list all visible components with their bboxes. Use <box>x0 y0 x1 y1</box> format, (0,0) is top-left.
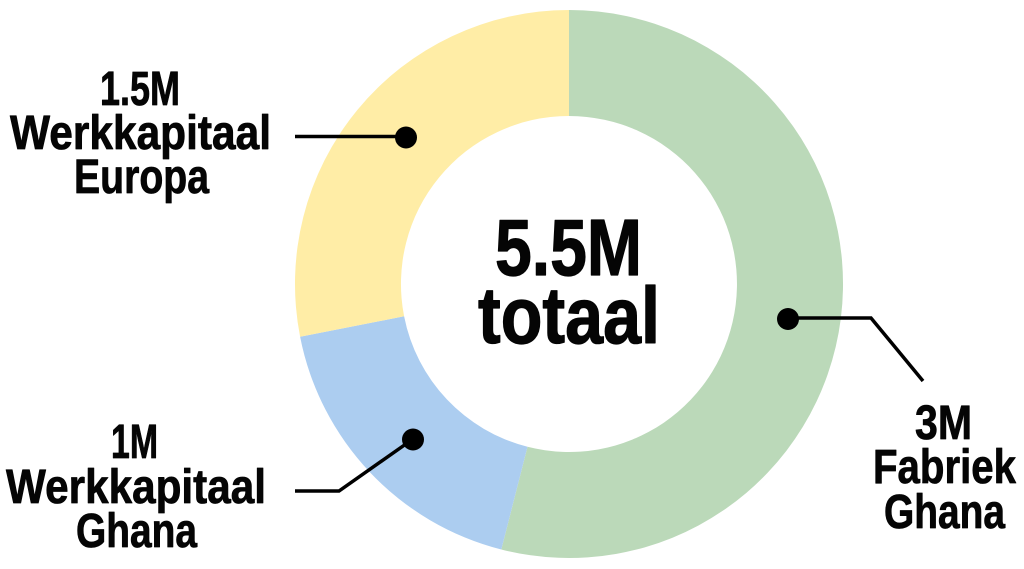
callout: 1.5M Werkkapitaal Europa: Europa <box>74 151 209 204</box>
segment: 3M Fabriek Ghana <box>501 10 843 558</box>
donut chart <box>295 10 843 558</box>
callout: 3M Fabriek Ghana <box>777 308 1016 539</box>
center total: totaal <box>478 271 660 360</box>
segment: 1M Werkkapitaal Ghana <box>300 316 528 550</box>
callout: 1.5M Werkkapitaal Europa: 1.5M <box>100 63 180 116</box>
callout: 1.5M Werkkapitaal Europa: Werkkapitaal <box>10 107 271 160</box>
callout: 3M Fabriek Ghana: 3M <box>915 397 972 450</box>
callout: 1M Werkkapitaal Ghana: Werkkapitaal <box>6 461 266 514</box>
center total <box>478 203 660 360</box>
center total: 5.5M <box>495 203 642 292</box>
callout: 1.5M Werkkapitaal Europa <box>10 63 417 204</box>
segment: 1.5M Werkkapitaal Europa <box>295 10 569 337</box>
callout: 1M Werkkapitaal Ghana: Ghana <box>76 505 197 558</box>
callout: 1M Werkkapitaal Ghana: 1M <box>111 416 158 469</box>
callout: 1M Werkkapitaal Ghana <box>6 416 424 558</box>
